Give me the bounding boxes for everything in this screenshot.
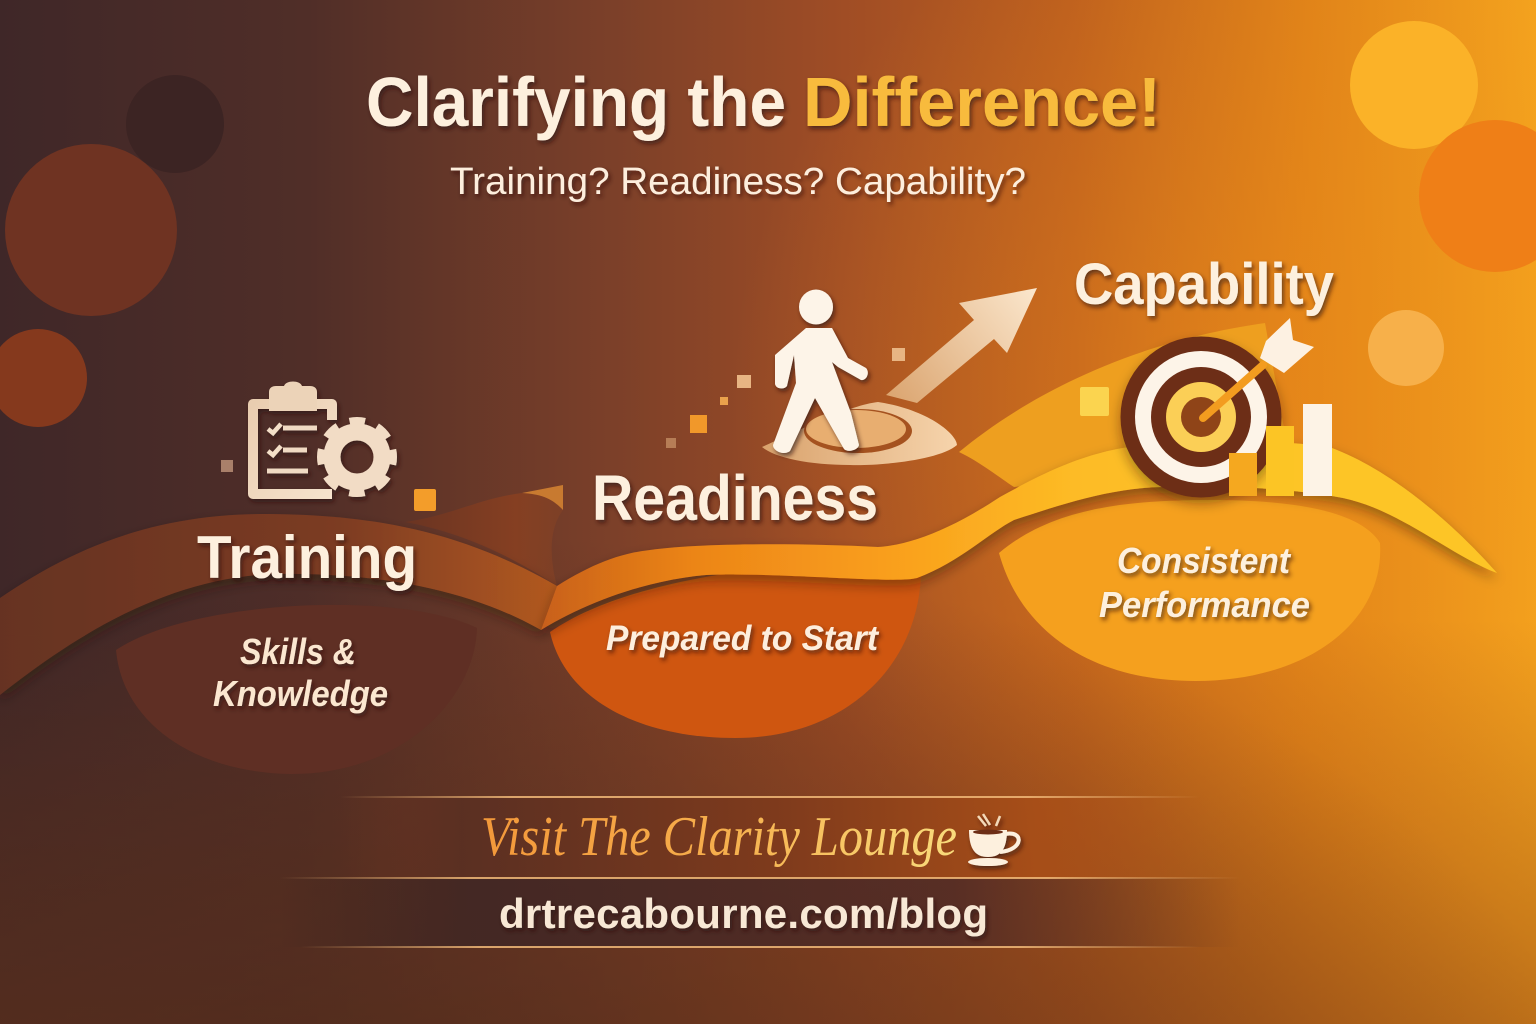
footer band: lounge xyxy=(340,797,1210,878)
icon: target with arrow xyxy=(1120,318,1314,498)
caption: Prepared to Start: Prepared to Start xyxy=(606,619,879,658)
subtitle: Training? Readiness? Capability? xyxy=(450,161,1026,203)
icon: walking person xyxy=(773,290,868,453)
decorative square xyxy=(1080,387,1109,416)
decorative circles left xyxy=(0,75,224,427)
title xyxy=(366,63,1161,141)
footer script heading: Visit The Clarity Lounge xyxy=(481,806,957,868)
footer band: url xyxy=(280,878,1240,947)
training ribbon xyxy=(0,514,557,695)
caption: Consistent Performance: Consistent xyxy=(1117,540,1292,581)
label: Training: Training xyxy=(197,524,417,591)
caption: Consistent Performance xyxy=(1099,540,1310,625)
caption: Skills & Knowledge: Skills & xyxy=(240,631,356,672)
decorative square xyxy=(221,460,233,472)
hill tip accent xyxy=(522,485,563,510)
icon: bar chart xyxy=(1229,404,1332,496)
spot under walker xyxy=(762,402,957,465)
decorative circles right xyxy=(1350,21,1536,386)
footer url: drtrecabourne.com/blog xyxy=(499,890,988,937)
icon: coffee cup xyxy=(968,814,1019,866)
blob: capability xyxy=(999,500,1380,681)
progress ribbon xyxy=(541,442,1497,630)
label: Capability: Capability xyxy=(1074,252,1334,317)
footer rules xyxy=(280,796,1240,948)
label: Readiness: Readiness xyxy=(592,462,878,534)
hill behind readiness xyxy=(405,492,563,586)
capability leaf xyxy=(959,323,1290,487)
decorative square xyxy=(414,489,436,511)
blob: readiness xyxy=(550,560,921,738)
caption: Skills & Knowledge xyxy=(213,631,388,714)
title: Difference! xyxy=(803,63,1161,141)
decorative squares: steps xyxy=(666,348,905,448)
icon: clipboard and gear xyxy=(253,382,392,494)
title: Clarifying the xyxy=(366,63,786,141)
blob: training xyxy=(116,605,477,774)
arrow: rising xyxy=(886,288,1037,403)
caption: Skills & Knowledge: Knowledge xyxy=(213,673,388,714)
caption: Consistent Performance: Performance xyxy=(1099,584,1310,625)
